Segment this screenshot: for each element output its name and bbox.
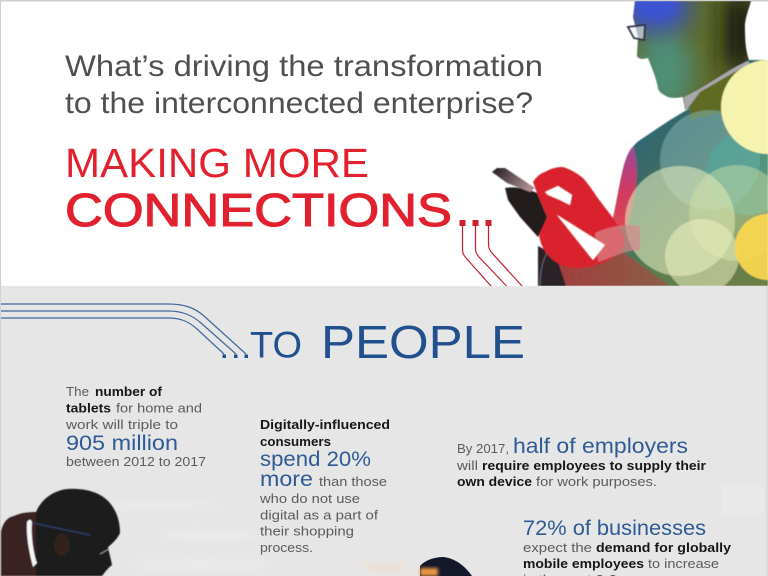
text block: digitally-influenced consumers: than those [319,474,387,489]
heading: to people: TO [250,324,302,366]
shoulders and torso [538,60,768,286]
blue circuit lines [1,304,246,354]
bokeh light circles [625,60,768,293]
text block: digitally-influenced consumers [259,417,390,555]
heading: making more connections: CONNECTIONS [65,184,452,236]
panel: header background [0,0,768,287]
text block: digitally-influenced consumers: process. [260,540,313,555]
title question [65,50,543,120]
text block: half of employers: By 2017, [457,441,509,456]
text block: tablets: number of [95,384,163,399]
text block: 72% of businesses [523,517,732,576]
photo: man using a phone [492,0,768,293]
photo: woman silhouette [1,489,120,576]
text block: half of employers: require employees to supply their [482,458,706,473]
text block: tablets [65,384,206,469]
heading: to people [222,316,525,368]
text block: digitally-influenced consumers: who do not use [259,491,360,506]
text block: digitally-influenced consumers: digital as a part of [260,508,378,522]
text block: half of employers: half of employers [513,435,688,458]
text block: digitally-influenced consumers: spend 20% [260,448,371,471]
text block: digitally-influenced consumers: more [260,468,313,491]
text block: 72% of businesses: 72% of businesses [523,517,706,540]
phone [492,168,535,192]
text block: digitally-influenced consumers: consumers [260,434,331,449]
title question: What’s driving the transformation [65,50,543,83]
dark holding hand [505,187,547,237]
heading: making more connections [65,140,452,236]
text block: half of employers: own device [457,474,532,489]
photo: man's hair at bottom [420,557,472,576]
man's head silhouette [626,1,752,110]
text block: tablets: between 2012 to 2017 [66,454,206,469]
text block: digitally-influenced consumers: Digitally-influenced [260,417,390,432]
text block: half of employers: for work purposes. [536,474,657,489]
text block: 72% of businesses: to increase [648,556,719,571]
text block: tablets: The [66,384,89,399]
text block: tablets: work will triple to [65,417,178,432]
red forearm and hand [533,167,640,268]
text block: 72% of businesses: demand for globally [596,540,732,555]
title question: to the interconnected enterprise? [65,87,533,120]
text block: half of employers [456,435,706,489]
text block: tablets: 905 million [66,432,178,455]
panel: people section background [0,286,768,576]
text block: half of employers: will [456,458,478,473]
text block: tablets: tablets [66,400,111,416]
text block: digitally-influenced consumers: their shopping [260,524,354,538]
heading: to people: PEOPLE [321,316,525,368]
text block: tablets: for home and [116,400,202,416]
red circuit lines [460,220,522,286]
heading: making more connections: MAKING MORE [65,140,369,186]
text block: 72% of businesses: mobile employees [523,556,644,571]
text block: 72% of businesses: expect the [523,540,592,555]
glasses [628,25,645,40]
